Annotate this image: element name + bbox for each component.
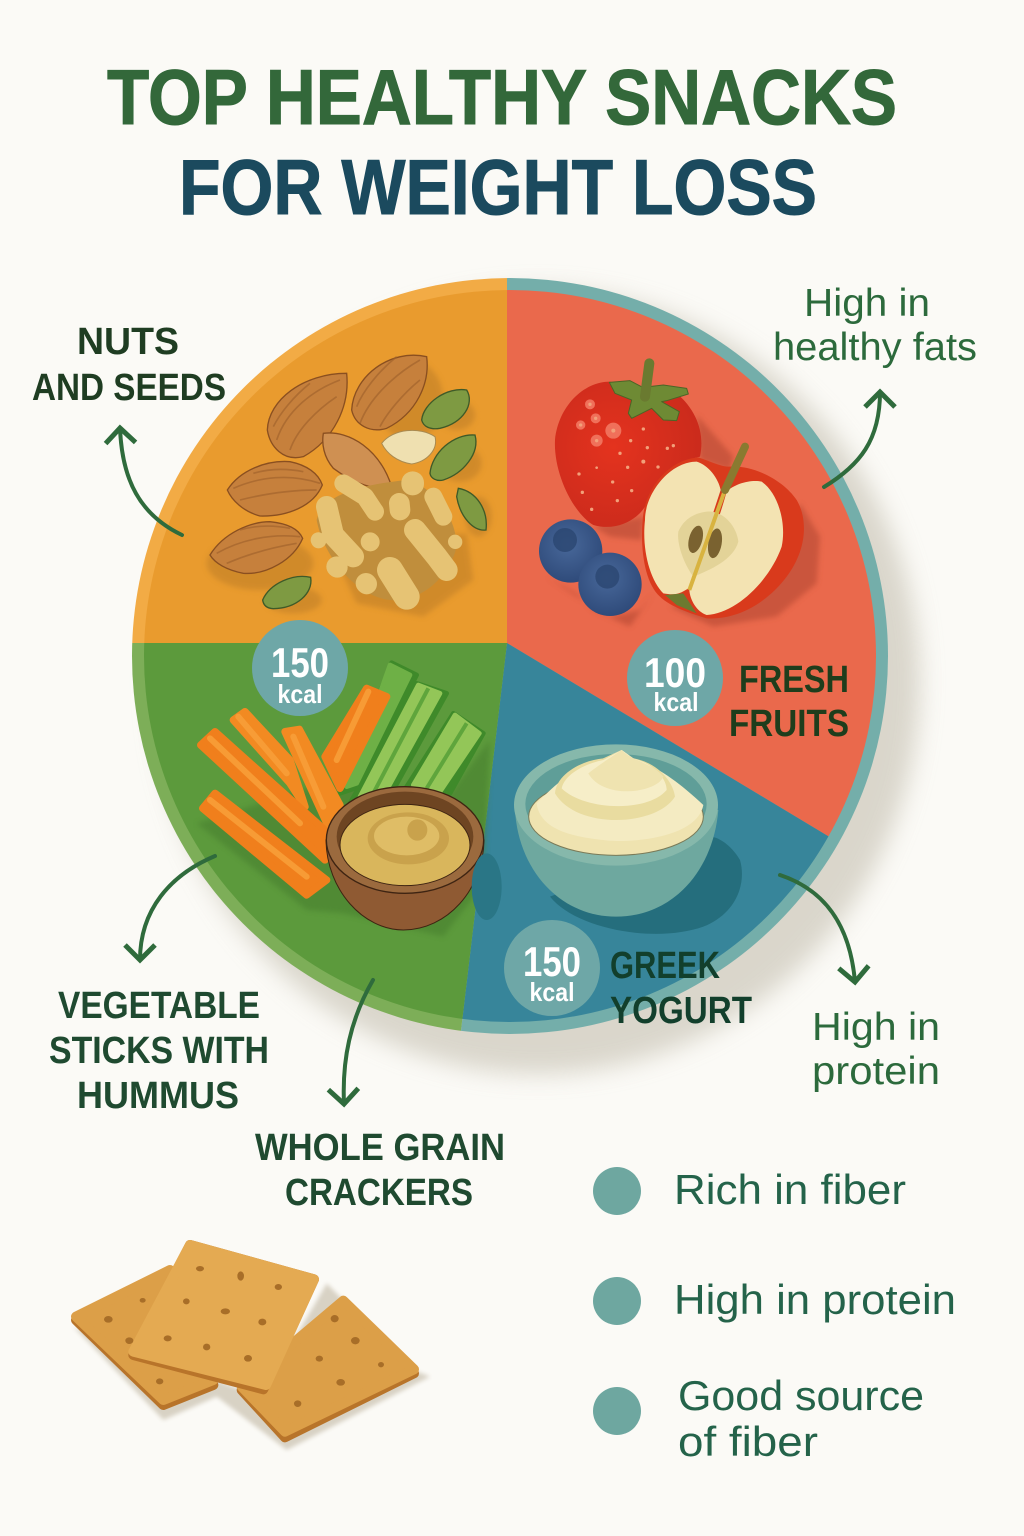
legend item: rich in fiber (593, 1166, 906, 1215)
carrots (201, 688, 387, 895)
arrow: whole grain (344, 980, 373, 1104)
title: FOR WEIGHT LOSS (179, 143, 817, 231)
badge: 150 kcal yogurt (504, 920, 600, 1016)
plate shadow (156, 290, 920, 1074)
label: greek yogurt: YOGURT (610, 990, 752, 1032)
strawberry body (555, 382, 701, 527)
blueberries (539, 519, 602, 583)
icon: yogurt bowl (472, 744, 742, 934)
label: greek yogurt: GREEK (610, 945, 720, 987)
apple flesh (644, 462, 721, 594)
slice: vegetable sticks (144, 643, 507, 1019)
icon: strawberry and apple (539, 363, 820, 627)
icon: vegetables and hummus (197, 663, 490, 937)
shadow (550, 837, 742, 934)
badge: 100 kcal: 100 (644, 649, 706, 696)
walnut (317, 480, 457, 600)
badge: 150 kcal yogurt: 150 (523, 938, 581, 985)
cashew (382, 430, 436, 464)
arrow: vegetable sticks (140, 856, 215, 960)
badge: 150 kcal nuts (252, 620, 348, 716)
leaves (609, 381, 688, 421)
label: nuts and seeds: NUTS (77, 321, 179, 363)
legend item: good source of fiber (593, 1372, 924, 1465)
label: whole grain crackers: WHOLE GRAIN (255, 1127, 505, 1169)
pumpkin seeds (263, 390, 486, 609)
shadows (547, 415, 820, 627)
legend item: good source of fiber: Good source (678, 1372, 924, 1419)
plate (132, 278, 930, 1084)
icon: nuts (207, 355, 492, 617)
celery (340, 663, 483, 803)
label: fresh fruits: FRUITS (729, 703, 849, 745)
shadow (197, 740, 490, 937)
arrow: healthy fats (824, 392, 880, 487)
plate rim (132, 278, 888, 1034)
label: greek yogurt (610, 945, 752, 1032)
label: high in healthy fats (773, 282, 977, 369)
label: high in protein: protein (812, 1050, 940, 1093)
legend item: good source of fiber: of fiber (678, 1418, 818, 1465)
label: nuts and seeds: AND SEEDS (32, 367, 226, 409)
arrow: protein (780, 875, 855, 982)
badge: 150 kcal nuts: 150 (271, 639, 329, 686)
badge: 100 kcal: kcal (654, 687, 698, 717)
slice: fresh fruits (507, 290, 876, 836)
label: high in protein (812, 1006, 940, 1093)
legend (593, 1166, 956, 1465)
slice: nuts and seeds (144, 290, 507, 643)
title (107, 53, 897, 231)
label: fresh fruits: FRESH (739, 659, 849, 701)
label: high in healthy fats: High in (804, 282, 930, 325)
icon: crackers (73, 1245, 430, 1450)
badge: 100 kcal (627, 630, 723, 726)
legend item: high in protein: High in protein (674, 1276, 956, 1323)
apple skin (642, 457, 804, 618)
label: vegetable sticks with hummus (49, 985, 269, 1117)
label: whole grain crackers (255, 1127, 505, 1214)
label: vegetable sticks with hummus: HUMMUS (77, 1075, 239, 1117)
label: high in healthy fats: healthy fats (773, 326, 977, 369)
slice: greek yogurt (462, 643, 828, 1022)
arrow: nuts (120, 428, 182, 535)
badge: 150 kcal yogurt: kcal (530, 977, 574, 1007)
label: whole grain crackers: CRACKERS (285, 1172, 473, 1214)
label: high in protein: High in (812, 1006, 940, 1049)
label: nuts and seeds (32, 321, 226, 409)
stem (645, 363, 649, 397)
legend item: rich in fiber: Rich in fiber (674, 1166, 906, 1213)
almonds (210, 355, 427, 573)
label: vegetable sticks with hummus: VEGETABLE (58, 985, 260, 1027)
title: TOP HEALTHY SNACKS (107, 53, 897, 141)
badge: 150 kcal nuts: kcal (278, 679, 322, 709)
bowl (326, 840, 484, 930)
label: vegetable sticks with hummus: STICKS WITH (49, 1030, 269, 1072)
label: fresh fruits (729, 659, 849, 745)
